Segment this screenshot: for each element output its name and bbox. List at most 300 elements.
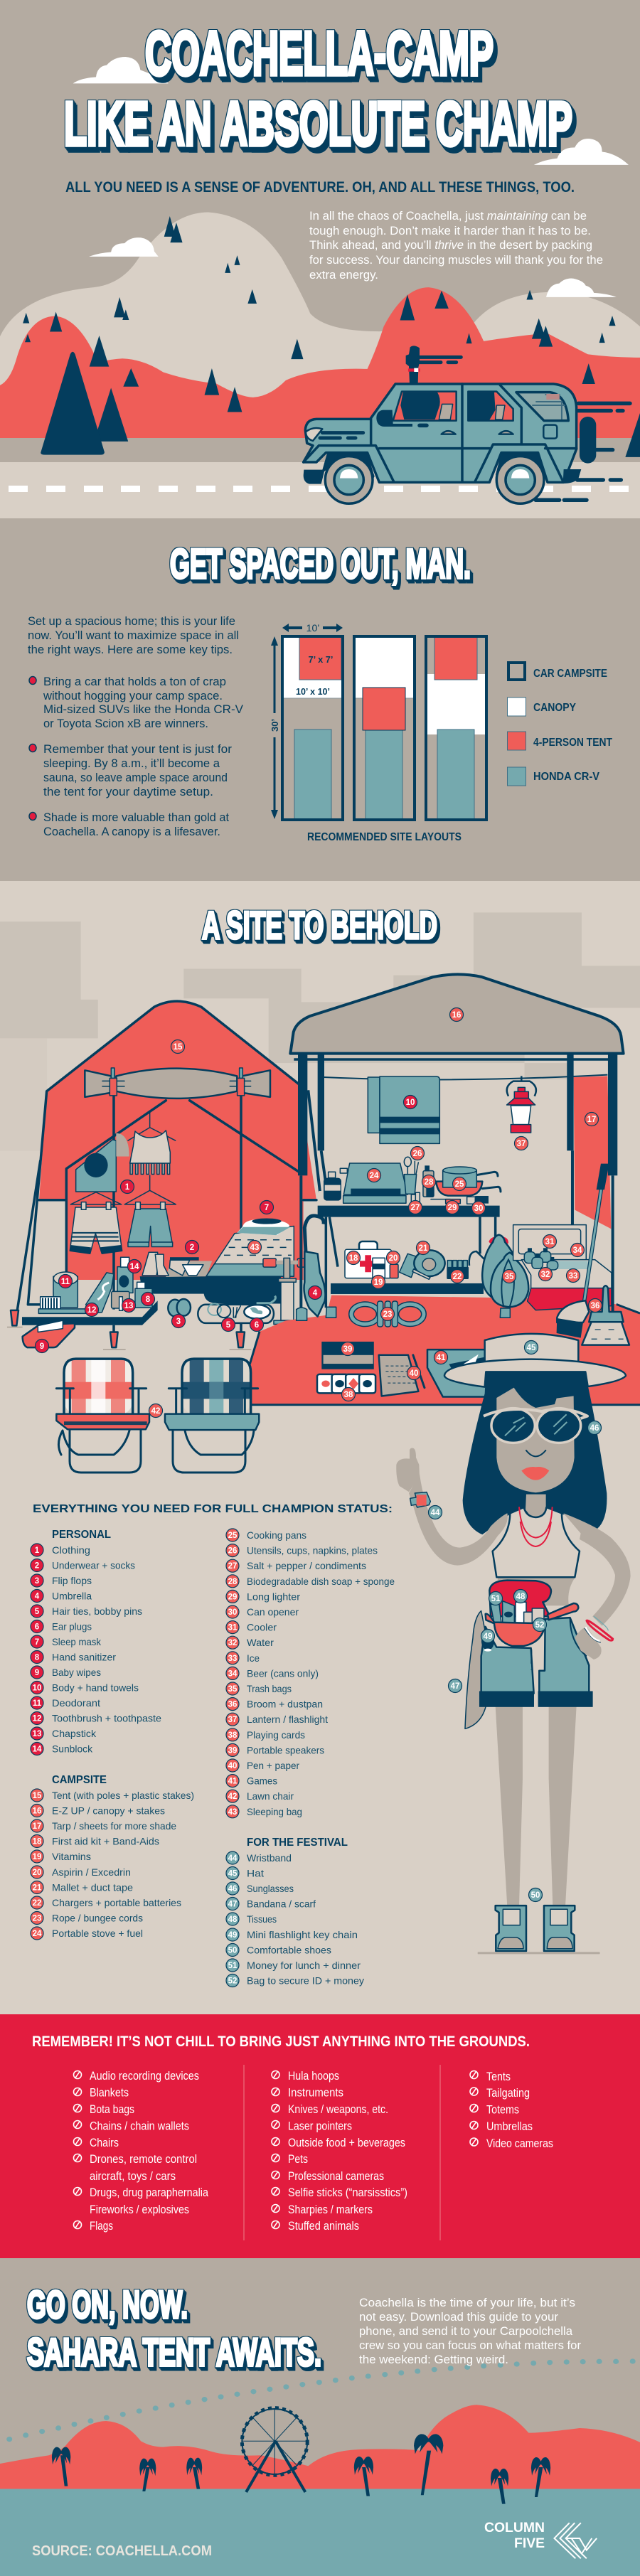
mallet and tape	[400, 1250, 445, 1279]
closing paragraph: the weekend: Getting weird.	[359, 2353, 508, 2366]
list: campsite continued: Biodegradable dish soap + sponge	[247, 1576, 395, 1587]
number badges: festival: 46	[590, 1424, 599, 1433]
number badges: campsite: 30	[474, 1204, 483, 1213]
list column 2: Laser pointers	[288, 2120, 352, 2133]
list: campsite: E-Z UP / canopy + stakes	[52, 1805, 165, 1816]
list: campsite continued: 34	[228, 1669, 238, 1678]
list: campsite: 19	[33, 1853, 41, 1861]
list: campsite continued: Games	[247, 1775, 277, 1787]
list: campsite continued: Cooking pans	[247, 1529, 306, 1541]
car body	[304, 384, 577, 482]
ground tarp	[250, 1295, 640, 1405]
intro paragraph	[309, 209, 603, 282]
list: personal: 8	[35, 1654, 40, 1662]
list: campsite continued: Utensils, cups, napkins, plates	[247, 1545, 378, 1556]
tip 2: sauna, so leave ample space around	[43, 771, 228, 784]
list: campsite continued: 25	[228, 1532, 238, 1540]
list: personal: Flip flops	[52, 1575, 92, 1586]
list column 2: Sharpies / markers	[288, 2203, 373, 2216]
number badges: campsite: 42	[151, 1407, 160, 1416]
heading: REMEMBER! IT’S NOT CHILL TO BRING JUST ANYTHING INTO THE GROUNDS.	[32, 2033, 530, 2050]
number badges: personal: 6	[255, 1321, 259, 1330]
list column 2	[272, 2070, 407, 2233]
list: campsite continued: 32	[228, 1639, 237, 1647]
left arm	[409, 1474, 508, 1566]
canopy top	[290, 974, 624, 1054]
intro paragraph: tough enough. Don’t make it harder than it has to be.	[309, 224, 591, 237]
list column 1: Drugs, drug paraphernalia	[90, 2186, 209, 2199]
list: for the festival: 44	[228, 1854, 238, 1863]
layout 1: 7’ x 7’	[309, 654, 333, 665]
number badges: personal	[36, 1095, 417, 1352]
front window	[376, 392, 457, 427]
upper body	[396, 1334, 631, 1660]
list: personal: Underwear + socks	[52, 1560, 135, 1571]
number badges: campsite: 22	[453, 1273, 462, 1281]
source: SOURCE: COACHELLA.COM	[32, 2543, 212, 2559]
list: campsite continued: Trash bags	[247, 1683, 292, 1694]
column five logo: FIVE	[514, 2536, 545, 2551]
list: personal: Deodorant	[52, 1697, 100, 1709]
list: personal: 11	[33, 1699, 42, 1708]
list column 2: Hula hoops	[288, 2070, 339, 2083]
number badges: campsite: 17	[587, 1116, 596, 1124]
number badges: campsite: 38	[344, 1391, 353, 1399]
number badges: campsite: 20	[389, 1254, 398, 1263]
list: campsite continued: 30	[228, 1608, 237, 1617]
depth dimension	[270, 636, 280, 819]
number badges: campsite	[149, 1008, 602, 1418]
list: campsite continued: 35	[228, 1685, 238, 1694]
batteries	[447, 1261, 469, 1279]
list column 1: Bota bags	[90, 2103, 134, 2116]
list: personal: 10	[33, 1684, 41, 1692]
intro text	[28, 614, 239, 656]
tip 2: Remember that your tent is just for	[43, 742, 232, 756]
necklace	[519, 1507, 553, 1546]
SUV	[304, 346, 630, 503]
pans	[436, 1167, 501, 1196]
list: campsite: 22	[33, 1899, 41, 1908]
list: personal: Hair ties, bobby pins	[52, 1605, 142, 1617]
list: personal: 9	[35, 1669, 39, 1677]
number badges: campsite: 35	[505, 1273, 514, 1281]
socks and underwear	[142, 1252, 212, 1277]
number badges: festival: 48	[516, 1593, 526, 1601]
list: campsite continued	[226, 1529, 395, 1818]
number badges: campsite: 16	[452, 1011, 461, 1020]
list: campsite continued: Lawn chair	[247, 1790, 294, 1802]
column five logo	[484, 2521, 597, 2558]
list: campsite: 15	[33, 1792, 42, 1800]
legend: HONDA CR-V	[533, 771, 599, 783]
intro paragraph: for success. Your dancing muscles will thank you for the	[309, 253, 603, 267]
list: for the festival: Money for lunch + dinner	[247, 1960, 361, 1971]
number badges: festival: 49	[484, 1632, 492, 1641]
salt, lighter, opener	[411, 1192, 489, 1204]
broom and dustpan	[557, 1164, 629, 1345]
list column 2: Professional cameras	[288, 2170, 384, 2183]
tent	[7, 1001, 316, 1350]
heading: GO ON, NOW.	[27, 2282, 188, 2326]
tagline: ALL YOU NEED IS A SENSE OF ADVENTURE. OH, AND ALL THESE THINGS, TOO.	[65, 179, 575, 196]
closing paragraph: not easy. Download this guide to your	[359, 2310, 558, 2324]
list: for the festival: Wristband	[247, 1852, 292, 1864]
closing paragraph: crew so you can focus on what matters for	[359, 2339, 581, 2352]
list: campsite continued: Pen + paper	[247, 1760, 299, 1771]
list: campsite: Rope / bungee cords	[52, 1913, 143, 1924]
wristband	[410, 1492, 430, 1507]
number badges: campsite: 19	[374, 1278, 383, 1287]
list: campsite continued: 43	[228, 1808, 237, 1817]
number badges: campsite: 34	[573, 1246, 582, 1255]
list column 2: Outside food + beverages	[288, 2137, 405, 2149]
top	[493, 1507, 580, 1577]
lower body	[465, 1611, 600, 1954]
speed lines	[535, 403, 630, 500]
pouch	[486, 1614, 545, 1646]
tip 1: without hogging your camp space.	[43, 689, 223, 702]
list: campsite continued: Beer (cans only)	[247, 1667, 319, 1679]
list: personal: Baby wipes	[52, 1667, 101, 1678]
woman	[396, 1334, 631, 1954]
list column 2: Selfie sticks (“narsisstics”)	[288, 2186, 407, 2199]
list: for the festival: 45	[228, 1870, 238, 1878]
list: personal: Sleep mask	[52, 1636, 102, 1647]
tip 2: the tent for your daytime setup.	[43, 785, 213, 798]
list column 2: Pets	[288, 2153, 308, 2166]
list: campsite continued: 36	[228, 1701, 237, 1709]
bandana	[465, 1611, 486, 1728]
cargo window	[516, 392, 568, 421]
list: for the festival: Bag to secure ID + money	[247, 1975, 364, 1987]
chair legs	[58, 1431, 254, 1473]
list: for the festival: Hat	[247, 1867, 264, 1878]
intro paragraph: In all the chaos of Coachella, just maintaining can be	[309, 209, 587, 223]
list column 2: Knives / weapons, etc.	[288, 2103, 388, 2116]
list: campsite continued: 42	[228, 1792, 237, 1801]
list: personal: Chapstick	[52, 1728, 97, 1739]
chair blue	[165, 1359, 259, 1430]
checklist heading: EVERYTHING YOU NEED FOR FULL CHAMPION STATUS:	[33, 1503, 393, 1515]
number badges: campsite: 43	[250, 1244, 259, 1252]
fanny pack contents	[489, 1581, 578, 1624]
rope line	[324, 1075, 607, 1079]
list: personal: 3	[35, 1577, 39, 1586]
list: for the festival: 49	[228, 1931, 237, 1940]
list: campsite continued: Salt + pepper / condiments	[247, 1560, 366, 1571]
tip 2: sleeping. By 8 a.m., it’ll become a	[43, 757, 220, 770]
list: campsite: Tarp / sheets for more shade	[52, 1820, 176, 1832]
list: for the festival: Tissues	[247, 1913, 277, 1925]
number badges: campsite: 27	[411, 1204, 420, 1212]
list: personal: Umbrella	[52, 1590, 92, 1601]
list: campsite continued: 26	[228, 1547, 237, 1556]
spare tire	[580, 417, 596, 464]
tip 3	[29, 811, 229, 838]
number badges: personal: 1	[125, 1183, 130, 1192]
number badges: campsite: 41	[437, 1354, 446, 1362]
pen and paper	[379, 1355, 425, 1396]
title	[64, 19, 572, 159]
intro paragraph: extra energy.	[309, 268, 378, 282]
legs	[496, 1706, 577, 1906]
list column 1: Flags	[90, 2220, 113, 2233]
utensils	[404, 1157, 418, 1194]
coral mountains	[0, 287, 640, 438]
intro text: the right ways. Here are some key tips.	[28, 643, 233, 656]
number badges: campsite: 39	[343, 1345, 352, 1354]
tip 3: Coachella. A canopy is a lifesaver.	[43, 825, 220, 838]
number badges: festival: 45	[527, 1344, 536, 1352]
tarp side	[574, 1076, 611, 1229]
list: campsite continued: 33	[228, 1655, 237, 1663]
list: personal: Toothbrush + toothpaste	[52, 1712, 161, 1723]
list: personal: Hand sanitizer	[52, 1651, 116, 1662]
game box	[427, 1350, 490, 1396]
width dimension: 10’	[306, 622, 319, 634]
panel: hero	[0, 0, 640, 518]
list: personal: Sunblock	[52, 1743, 93, 1755]
shorts	[479, 1618, 593, 1707]
list: campsite: 18	[33, 1837, 42, 1846]
list: campsite continued: Cooler	[247, 1622, 277, 1633]
coral hills	[0, 2405, 640, 2489]
number badges: campsite: 36	[591, 1302, 599, 1310]
list: for the festival: Bandana / scarf	[247, 1898, 316, 1910]
chairs	[56, 1359, 259, 1430]
intro text: now. You’ll want to maximize space in all	[28, 629, 239, 642]
intro text: Set up a spacious home; this is your life	[28, 614, 235, 628]
road	[0, 438, 640, 518]
heading	[27, 2282, 321, 2374]
air pump	[263, 1258, 310, 1324]
hair ties and ear plugs	[198, 1295, 275, 1323]
number badges: campsite: 25	[455, 1180, 464, 1189]
tip 1: Bring a car that holds a ton of crap	[43, 675, 226, 688]
list: campsite: Tent (with poles + plastic stakes)	[52, 1790, 194, 1801]
list: campsite: CAMPSITE	[52, 1774, 107, 1786]
panel: a site to behold	[0, 881, 640, 2014]
wheels	[304, 456, 581, 503]
list column 1: Blankets	[90, 2086, 129, 2099]
light mountains	[0, 212, 640, 438]
list: campsite continued: 27	[228, 1562, 237, 1571]
depth dimension: 30’	[270, 719, 280, 732]
tent vent	[85, 1069, 270, 1099]
list column 3: Tents	[486, 2070, 511, 2083]
legend	[508, 663, 612, 786]
number badges: campsite: 31	[545, 1238, 555, 1246]
neck	[526, 1495, 546, 1517]
list: campsite continued: Sleeping bag	[247, 1806, 302, 1817]
list: campsite continued: 41	[228, 1778, 238, 1786]
legend: CAR CAMPSITE	[533, 668, 607, 680]
list: campsite continued: 40	[228, 1762, 237, 1770]
list: personal: 13	[33, 1730, 41, 1738]
roof cargo	[406, 346, 461, 384]
list: campsite continued: 37	[228, 1716, 237, 1724]
list: personal: Ear plugs	[52, 1621, 92, 1632]
closing paragraph: Coachella is the time of your life, but it’s	[359, 2296, 575, 2309]
column five logo: COLUMN	[484, 2521, 545, 2535]
layout 1: 10’ x 10’	[296, 686, 330, 697]
hand	[396, 1448, 420, 1492]
list: for the festival: FOR THE FESTIVAL	[247, 1837, 348, 1849]
list column 1: Audio recording devices	[90, 2070, 199, 2083]
list: campsite: 23	[33, 1914, 41, 1923]
number badges: festival: 52	[535, 1621, 544, 1630]
trash bags	[469, 1235, 528, 1318]
number badges: campsite: 28	[425, 1178, 434, 1187]
list column 3: Tailgating	[486, 2087, 530, 2100]
games and cards	[317, 1342, 490, 1396]
list: personal: Clothing	[52, 1544, 90, 1556]
number badges: campsite: 18	[349, 1254, 358, 1263]
shelf with toiletries	[22, 1257, 158, 1347]
car details	[306, 425, 557, 441]
list: personal: 6	[35, 1623, 39, 1631]
face	[496, 1388, 575, 1492]
layout 3	[426, 636, 486, 820]
legend: CANOPY	[533, 702, 576, 714]
list column 2: Stuffed animals	[288, 2220, 359, 2233]
number badges: festival	[428, 1341, 602, 1901]
dividers	[244, 2065, 440, 2240]
legend: 4-PERSON TENT	[533, 737, 612, 749]
midriff	[496, 1578, 575, 1605]
canopy frame	[294, 1054, 617, 1320]
number badges: personal: 9	[40, 1342, 44, 1351]
tip 1: Mid-sized SUVs like the Honda CR-V	[43, 702, 244, 716]
list: for the festival: 48	[228, 1915, 238, 1924]
intro paragraph: Think ahead, and you’ll thrive in the desert by packing	[309, 238, 592, 252]
list column 2: Instruments	[288, 2086, 343, 2099]
tip 2	[29, 742, 232, 798]
list: campsite: Mallet + duct tape	[52, 1881, 133, 1893]
list: personal: 7	[35, 1638, 39, 1647]
list: for the festival: 46	[228, 1885, 237, 1893]
layout 1	[282, 636, 343, 820]
smile and lips	[521, 1450, 549, 1480]
number badges: personal: 7	[265, 1204, 269, 1212]
list: for the festival: 47	[228, 1900, 237, 1908]
number badges: personal: 11	[61, 1278, 70, 1286]
number badges: campsite: 29	[448, 1204, 457, 1212]
list: personal: 5	[35, 1608, 40, 1616]
number badges: personal: 14	[130, 1263, 139, 1271]
list column 1: Chairs	[90, 2137, 119, 2149]
number badges: personal: 13	[124, 1302, 133, 1310]
stove and fuel	[324, 1163, 407, 1203]
flip flops	[168, 1299, 191, 1316]
tip 1	[29, 675, 244, 730]
heading: SAHARA TENT AWAITS.	[27, 2330, 321, 2374]
list: campsite continued: Playing cards	[247, 1729, 305, 1741]
list: for the festival: 51	[228, 1962, 238, 1970]
number badges: personal: 4	[313, 1289, 318, 1298]
list column 3: Totems	[486, 2103, 519, 2116]
list: personal	[31, 1529, 161, 1755]
list: campsite: 24	[33, 1930, 42, 1938]
list column 1	[74, 2070, 209, 2233]
list: campsite	[31, 1774, 194, 1940]
trees	[23, 216, 640, 457]
number badges: campsite: 15	[174, 1043, 183, 1052]
number badges: personal: 8	[146, 1295, 151, 1304]
number badges: campsite: 26	[413, 1150, 422, 1158]
list column 3	[470, 2070, 553, 2150]
list column 1: aircraft, toys / cars	[90, 2170, 176, 2183]
palm trees	[52, 2434, 550, 2504]
dish soap	[423, 1165, 434, 1197]
list: campsite continued: 38	[228, 1731, 238, 1740]
list: campsite continued: Portable speakers	[247, 1744, 324, 1755]
rope	[351, 1301, 424, 1327]
ferris wheel	[242, 2408, 307, 2492]
panel: closing	[0, 2258, 640, 2576]
tip 3: Shade is more valuable than gold at	[43, 811, 229, 824]
number badges: campsite: 33	[569, 1272, 577, 1281]
number badges: personal: 3	[176, 1318, 181, 1326]
right arm	[563, 1513, 631, 1626]
list: for the festival	[226, 1837, 364, 1987]
hair	[463, 1371, 607, 1534]
list column 1: Chains / chain wallets	[90, 2120, 189, 2133]
list: campsite: 16	[33, 1807, 41, 1816]
list: campsite continued: Can opener	[247, 1606, 299, 1618]
rear window	[468, 392, 513, 421]
number badges: festival: 50	[531, 1891, 540, 1900]
number badges: campsite: 37	[517, 1140, 526, 1148]
number badges: personal: 12	[87, 1306, 96, 1315]
list: campsite continued: Water	[247, 1637, 274, 1648]
sunglasses	[484, 1409, 587, 1443]
list: campsite continued: 28	[228, 1578, 238, 1586]
canopy	[290, 974, 629, 1345]
boots	[478, 1906, 600, 1954]
closing paragraph: phone, and send it to your Carpoolchella	[359, 2324, 573, 2338]
background blocks	[0, 912, 640, 1151]
layout 2	[354, 636, 415, 820]
lower shelf	[331, 1268, 484, 1294]
clothing	[70, 1113, 176, 1254]
first aid kit	[345, 1241, 398, 1278]
list: personal: 2	[35, 1561, 39, 1570]
list: campsite: 21	[33, 1884, 42, 1893]
flashlight	[481, 1632, 494, 1652]
number badges: personal: 5	[226, 1321, 231, 1330]
list: campsite continued: Lantern / flashlight	[247, 1714, 328, 1725]
speakers	[321, 1342, 374, 1369]
list: campsite: Portable stove + fuel	[52, 1928, 143, 1939]
list: campsite continued: Long lighter	[247, 1591, 300, 1602]
sleeping bag	[206, 1218, 294, 1276]
list: personal: 12	[33, 1715, 41, 1723]
panel: get spaced out	[0, 518, 640, 881]
list: personal: 1	[35, 1546, 40, 1555]
dotted trail	[6, 2358, 636, 2442]
tent frame	[16, 1001, 316, 1315]
number badges: campsite: 24	[370, 1172, 379, 1180]
list: campsite: 17	[33, 1822, 41, 1831]
heading: A SITE TO BEHOLD	[202, 903, 437, 947]
list: for the festival: Sunglasses	[247, 1883, 294, 1894]
site layouts chart	[270, 622, 486, 843]
wheel arches	[321, 453, 545, 481]
cooler	[513, 1225, 612, 1310]
towels	[368, 1076, 439, 1143]
